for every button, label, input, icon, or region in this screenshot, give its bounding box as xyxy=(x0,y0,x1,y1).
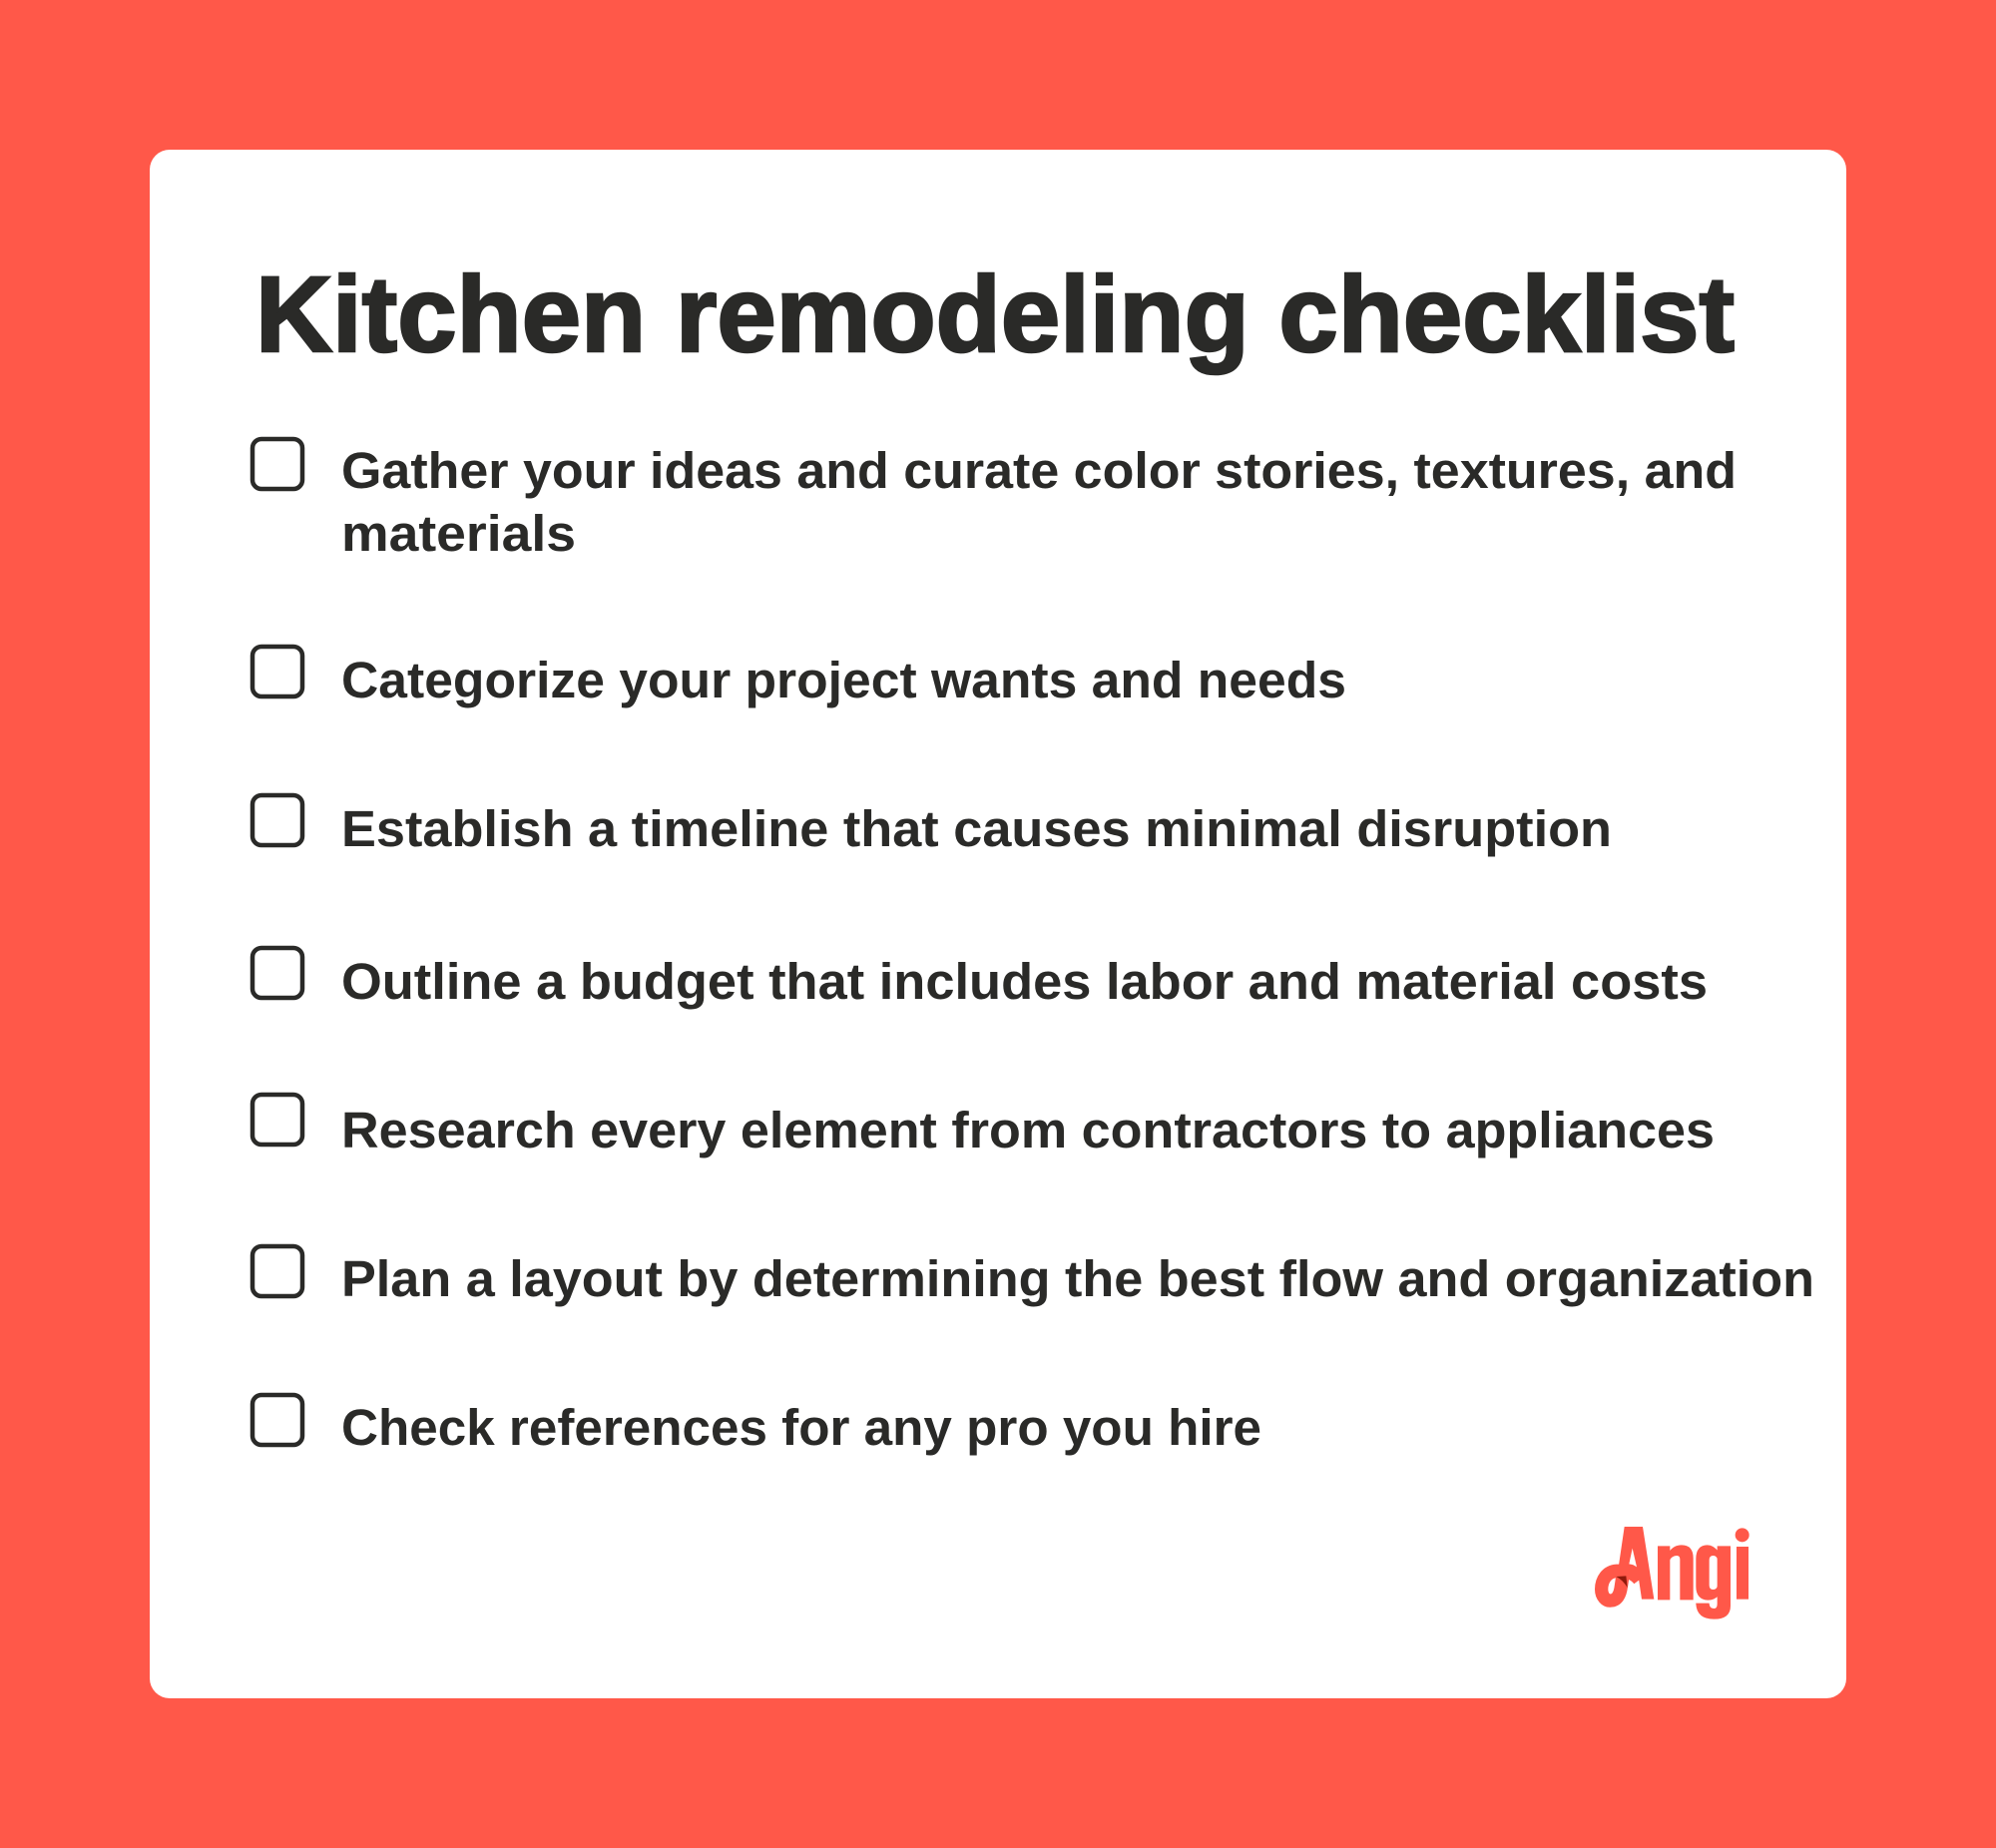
checklist item 3: Establish a timeline that causes minimal disruption xyxy=(341,800,1612,857)
checklist item 4: Outline a budget that includes labor and material costs xyxy=(341,953,1708,1010)
checklist item 5: Research every element from contractors to appliances xyxy=(341,1102,1715,1158)
checklist item 1 xyxy=(252,439,1737,562)
checklist item 6: Plan a layout by determining the best flow and organization xyxy=(341,1250,1814,1307)
checklist item 7: Check references for any pro you hire xyxy=(341,1399,1261,1456)
title: Kitchen remodeling checklist xyxy=(255,253,1735,374)
checklist item 1: materials xyxy=(341,505,576,562)
checklist item 2: Categorize your project wants and needs xyxy=(341,652,1346,708)
icon: Angi logo xyxy=(1602,1527,1749,1618)
checklist item 1: Gather your ideas and curate color stories, textures, and xyxy=(341,442,1737,499)
